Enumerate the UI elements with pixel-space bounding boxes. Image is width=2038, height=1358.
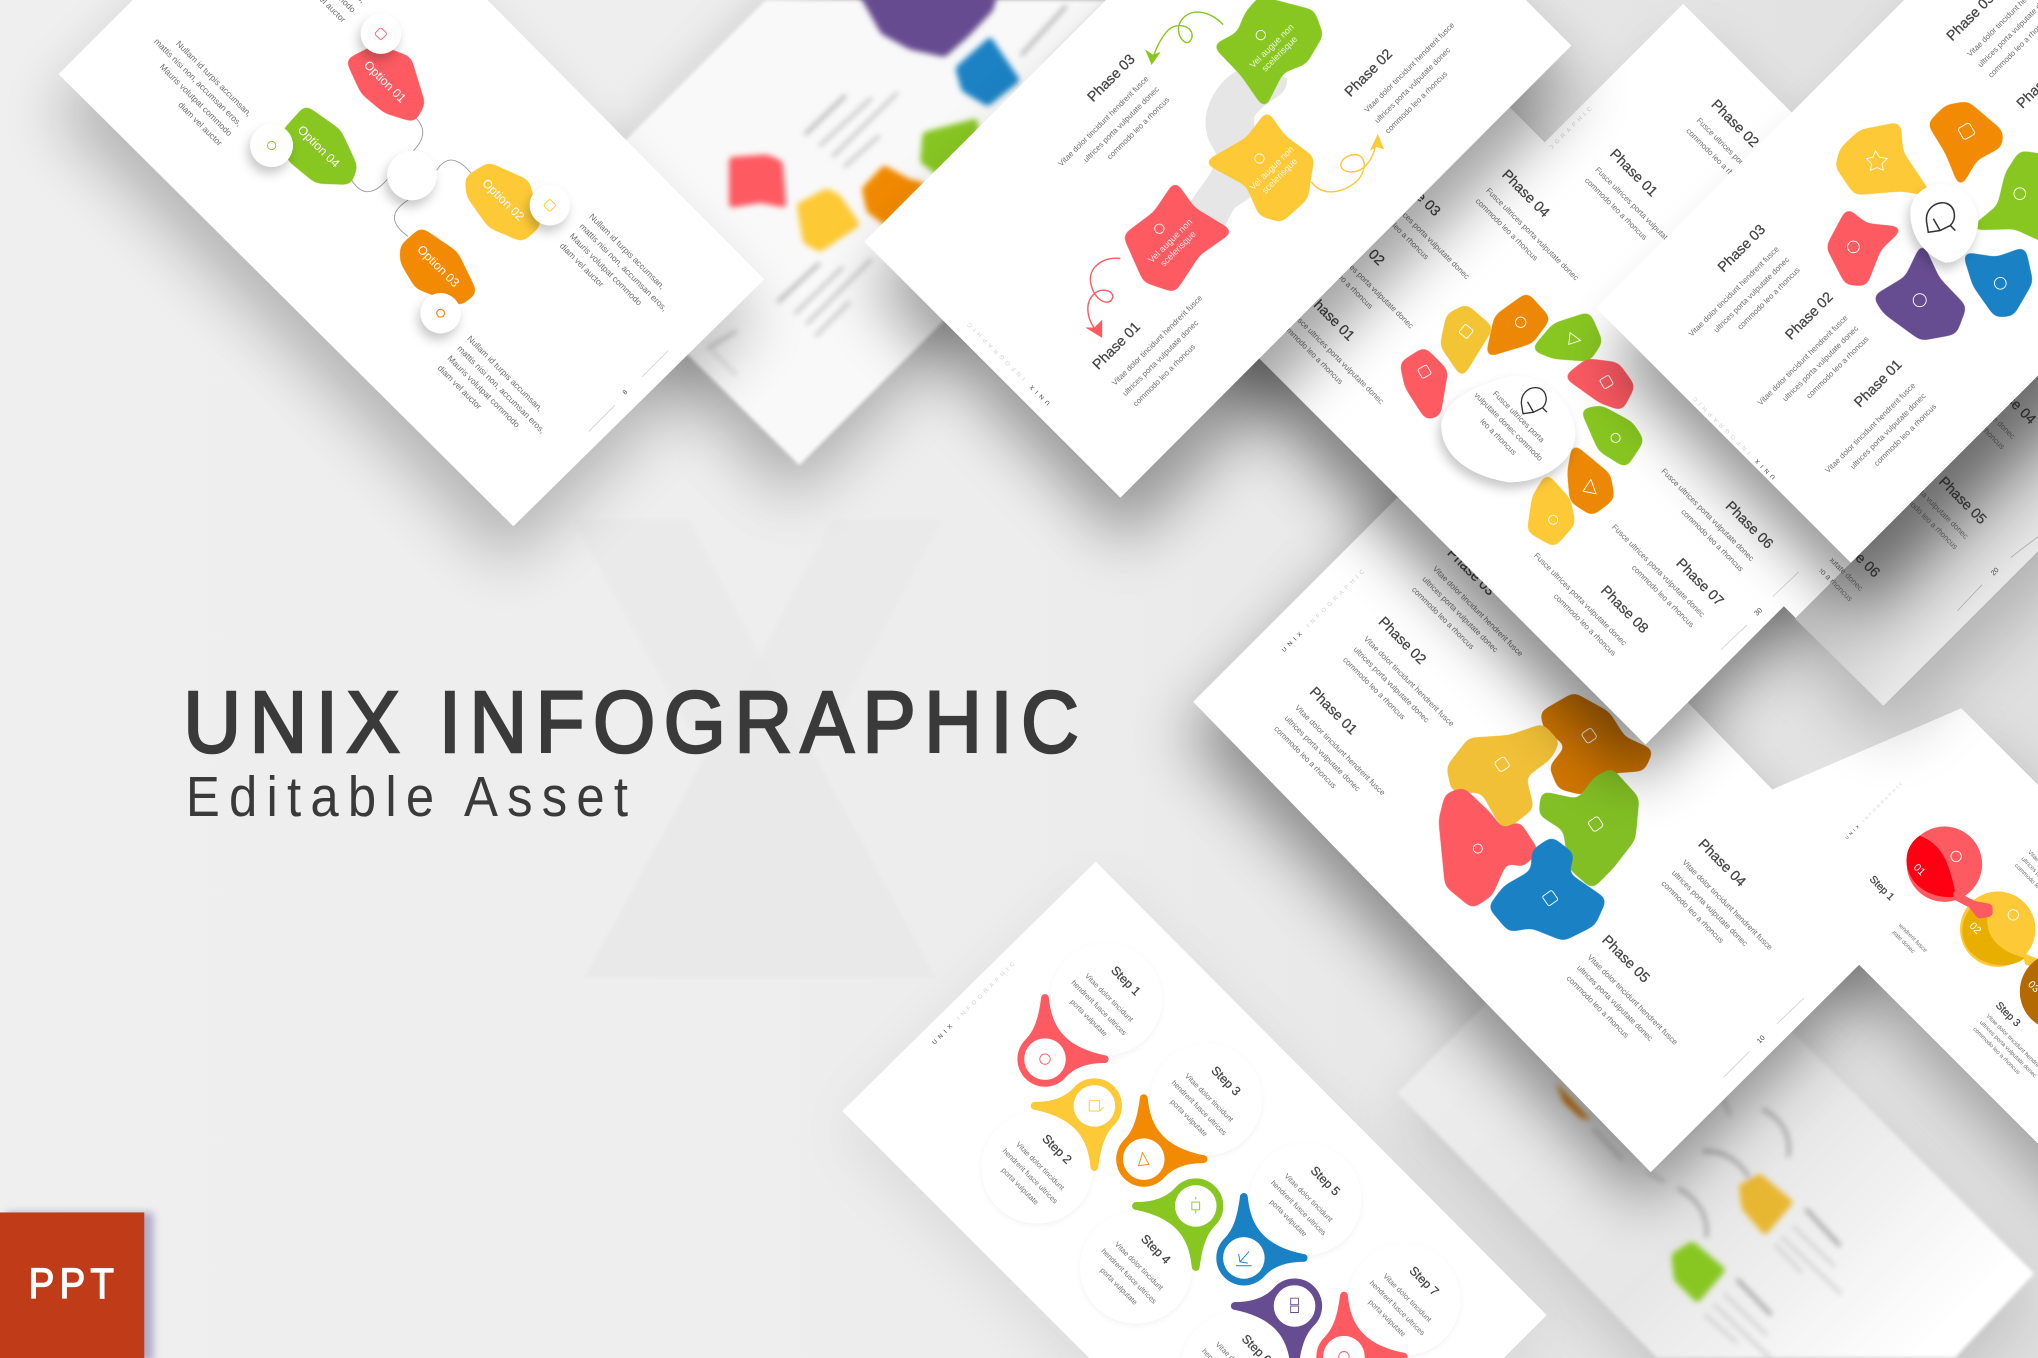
phase 08: Phase 08 <box>1597 583 1651 637</box>
slide label: UNIX INFOGRAPHIC <box>964 318 1052 406</box>
phase 05: Phase 05 <box>1935 474 1989 528</box>
phase 04: Phase 04 <box>1695 836 1749 890</box>
phase 03: commodo leo a rhoncus <box>1410 585 1476 651</box>
step 1 label: Step 1 <box>1867 874 1896 903</box>
phase 01: Phase 01 <box>1306 684 1360 738</box>
phase 01 <box>1272 684 1387 819</box>
shadow of five-blob slide <box>1185 485 1894 1206</box>
phase 04: Phase 04 <box>1985 374 2038 428</box>
step 7 bubble: Vitae dolor tincidunt <box>1381 1272 1434 1324</box>
petal: yellow <box>1835 122 1933 196</box>
ring: step 5 <box>1216 1193 1308 1286</box>
phase 03: ultrices porta vulputate donec <box>1081 85 1161 164</box>
step 4 bubble: hendrerit fusce ultrices <box>1099 1247 1159 1306</box>
blob: option 04: Option 04 <box>295 123 343 171</box>
blob: yellow: Vel augue non <box>1248 144 1296 192</box>
phase 01: commodo leo a rhoncus <box>1872 402 1938 468</box>
phase 02 <box>1342 20 1478 135</box>
step 3 text: ultrices porta vulputate donec <box>1978 1020 2037 1079</box>
phase 04: Vitae dolor tincidunt hendrerit fusce <box>1680 858 1775 952</box>
phase 01: Fusce ultrices porta vulputate donec <box>1593 165 1690 261</box>
connectors <box>350 114 472 237</box>
phase 03: Phase 03 <box>1444 545 1498 599</box>
blob: yellow <box>1204 110 1314 222</box>
phase 07: Fusce ultrices porta vulputate donec <box>1610 523 1706 619</box>
blob: option 02 <box>465 162 541 242</box>
phase 01: commodo leo a rhoncus <box>1131 342 1197 408</box>
phase 03: Vitae dolor tincidunt hendrerit fusce <box>1687 244 1781 338</box>
blob: red: Vel augue non <box>1146 217 1194 265</box>
phase 01 <box>1279 290 1385 416</box>
phase 04: Fusce ultrices porta vulputate donec <box>1484 186 1580 282</box>
page number: 30 <box>1753 606 1764 618</box>
phase 03: commodo leo a rhoncus <box>1105 95 1171 161</box>
page number: 8 <box>622 389 629 396</box>
phase 01: Phase 01 <box>1851 357 1905 411</box>
phase 05: Fusce ultrices porta vulputate donec <box>1874 445 1970 541</box>
slide: seven steps <box>842 862 1547 1358</box>
slide label: UNIX INFOGRAPHIC <box>1509 104 1596 191</box>
step 2 bubble: Step 2 <box>1039 1132 1075 1167</box>
shaded lower part <box>1795 368 2038 706</box>
petal: green lower <box>1580 405 1644 468</box>
phase 01: commodo leo a rhoncus <box>1272 724 1338 790</box>
phase 07: Phase 07 <box>1673 556 1727 610</box>
blob: red <box>1439 788 1539 908</box>
petal: orange <box>1928 101 2003 188</box>
phase 01: Vitae dolor tincidunt hendrerit fusce <box>1823 381 1918 475</box>
phase 03: Phase 03 <box>1715 222 1769 276</box>
phase 08: commodo leo a rhoncus <box>1552 592 1618 658</box>
blob: green <box>1539 768 1639 889</box>
phase 01: ultrices porta vulputate donec <box>1121 318 1200 398</box>
slide label: UNIX INFOGRAPHIC <box>1689 392 1777 480</box>
petal: green <box>1531 312 1603 361</box>
blob: option 03: Option 03 <box>414 242 462 290</box>
phase 01: commodo leo a rhoncus <box>1583 176 1649 242</box>
page number <box>1957 537 2038 611</box>
phase 07: commodo leo a rhoncus <box>1630 563 1696 629</box>
page number: 10 <box>1755 1034 1767 1045</box>
phase 02: commodo leo a rhoncus <box>1383 69 1449 135</box>
phase 06: Fusce ultrices porta vulputate donec <box>1660 467 1756 563</box>
shadow of eight-petal slide <box>1184 79 1886 781</box>
ring: step 7 <box>1316 1292 1408 1358</box>
phase 06: Phase 06 <box>1829 527 1883 581</box>
text: option 03: mattis nisi non, accumsan eros, <box>455 343 547 435</box>
phase 02: Phase 02 <box>1342 46 1396 100</box>
ring: step 3 <box>1116 1094 1207 1187</box>
step 1 text: Vitae dolor tincidunt hendrerit fusce <box>1857 884 1928 954</box>
step 4 bubble: Step 4 <box>1138 1232 1173 1267</box>
petal: orange <box>1486 292 1551 357</box>
slide: hidden phases behind flower <box>1432 4 2038 745</box>
ppt badge <box>0 1212 153 1358</box>
step 3 bubble <box>1150 1044 1262 1155</box>
slide label: UNIX INFOGRAPHIC <box>1281 566 1369 654</box>
phase 06: Phase 06 <box>1722 498 1776 552</box>
arrow: yellow <box>1311 134 1384 192</box>
slide label: UNIX INFOGRAPHIC <box>1844 779 1905 840</box>
text: option 04: Mauris volutpat commodo <box>158 62 234 138</box>
phase 02: commodo leo a rhoncus <box>1309 245 1375 311</box>
phase 06: Fusce ultrices porta vulputate donec <box>1769 497 1865 593</box>
phase 04: commodo leo a rhoncus <box>1474 197 1540 263</box>
droplet 03 <box>2020 953 2038 1031</box>
ring: step 2 <box>1031 1078 1122 1171</box>
step 1 text: ultrices porta vulputate donec <box>1856 896 1916 955</box>
step 3 bubble: Vitae dolor tincidunt <box>1183 1072 1235 1124</box>
phase 03: Vitae dolor tincidunt hendrerit fusce <box>1056 74 1151 168</box>
centre blob with text: vulputate donec commodo <box>1472 391 1545 463</box>
icon node: option 01 <box>361 14 401 54</box>
arrow: red <box>1085 258 1120 338</box>
phase 03 <box>1056 51 1172 189</box>
blob: blue <box>1488 837 1606 941</box>
phase 02 <box>1756 289 1871 428</box>
page number <box>1721 572 1799 650</box>
blob: yellow <box>1447 724 1560 832</box>
slide: blurred tag flow bottom right <box>1397 864 2034 1358</box>
step 2 bubble: Vitae dolor tincidunt <box>1014 1140 1066 1192</box>
ring: step 6 <box>1231 1278 1322 1358</box>
icon node: option 04 <box>250 124 293 167</box>
centre blob with text <box>1441 376 1575 482</box>
centre blob with text: Fusce ultrices porta <box>1491 389 1547 445</box>
phase 03: ultrices porta vulputate donec <box>1712 255 1791 334</box>
phase 04 top right <box>1944 0 2038 80</box>
step 7 bubble: hendrerit fusce ultrices <box>1368 1278 1427 1338</box>
phase 04: Fusce ultrices porta vulputate donec <box>1921 344 2017 441</box>
phase 06: commodo leo a rhoncus <box>1788 537 1854 603</box>
ppt badge: PPT <box>29 1259 114 1308</box>
step 5 bubble: Step 5 <box>1308 1163 1343 1199</box>
droplet 02: 02 <box>1967 921 1983 937</box>
text: option 04: Nullam id turpis accumsan, <box>174 39 254 118</box>
petal: yellow lower <box>1527 473 1575 547</box>
phase 04: commodo leo a rhoncus <box>1940 385 2007 451</box>
petal: yellow <box>1440 304 1493 378</box>
droplet 01 <box>1907 826 1993 919</box>
blurred coloured shapes <box>708 0 1105 374</box>
centre blob with icon <box>1910 184 1978 263</box>
phase 03 <box>1687 222 1802 359</box>
step 3 text: commodo leo a rhoncus <box>1971 1027 2021 1076</box>
petal: blue <box>1963 247 2033 317</box>
slide: blurred blobs top centre <box>542 0 1265 498</box>
phase 05: Phase 05 <box>1598 932 1652 986</box>
droplet 02 <box>1960 891 2038 969</box>
icon node: option 03 <box>420 293 461 333</box>
arrow: green <box>1145 12 1223 65</box>
step 3 bubble: porta vulputate <box>1169 1097 1209 1138</box>
ring: step 4 <box>1132 1178 1223 1271</box>
subtitle: Editable Asset <box>186 766 628 829</box>
phase 07 <box>1600 523 1727 629</box>
phase 02: Fusce ultrices porta vulputate donec <box>1319 234 1415 330</box>
phase 05: ultrices porta vulputate donec <box>1575 963 1655 1043</box>
slide: five blobs <box>1193 451 1902 1172</box>
centre blob with text: leo a rhoncus <box>1478 417 1518 457</box>
title block <box>183 673 1079 829</box>
step 7 bubble: Step 7 <box>1407 1264 1442 1299</box>
step 7 bubble: porta vulputate <box>1367 1297 1408 1338</box>
phase 01: Vitae dolor tincidunt hendrerit fusce <box>1293 703 1387 798</box>
text: option 03: diam vel auctor <box>436 363 484 411</box>
icon node: option 02 <box>530 185 570 225</box>
blurred shapes <box>1556 1083 1840 1358</box>
phase 06 <box>1649 467 1776 573</box>
blob: green <box>1213 0 1323 109</box>
text: option 02: diam vel auctor <box>558 241 606 289</box>
phase 03: commodo leo a rhoncus <box>1736 265 1802 332</box>
slide: droplet steps far right <box>1710 708 2038 1358</box>
step 5 bubble: porta vulputate <box>1268 1197 1309 1238</box>
text: option 03: Mauris volutpat commodo <box>446 353 522 430</box>
centre node <box>387 151 437 200</box>
phase 02: ultrices porta vulputate donec <box>1781 324 1860 403</box>
petal: orange lower <box>1567 443 1614 516</box>
text: option 04: mattis nisi non, accumsan eros, <box>152 36 244 128</box>
step 4 bubble: porta vulputate <box>1098 1266 1139 1307</box>
slide: flower <box>1596 0 2038 615</box>
phase 01: Phase 01 <box>1606 146 1660 200</box>
phase 01: Fusce ultrices porta vulputate donec <box>1289 310 1385 406</box>
phase 02: Vitae dolor tincidunt hendrerit fusce <box>1362 634 1456 729</box>
text: option 02: Mauris volutpat commodo <box>568 231 644 308</box>
phase 02 <box>1341 614 1456 750</box>
phase 05 <box>1565 932 1680 1068</box>
phase 02: ultrices porta vulputate donec <box>1352 645 1431 724</box>
step 5 bubble: Vitae dolor tincidunt <box>1283 1172 1335 1224</box>
phase 01: commodo leo a rhoncus <box>1279 320 1345 386</box>
step 1 bubble: hendrerit fusce ultrices <box>1070 978 1129 1037</box>
icon: head <box>1521 388 1547 414</box>
phase 03 <box>1410 545 1525 680</box>
phase 06 <box>1758 497 1883 603</box>
phase 03: ultrices porta vulputate donec <box>1420 575 1500 654</box>
phase 02: Phase 02 <box>1708 97 1762 151</box>
step 4 bubble <box>1080 1212 1192 1324</box>
petal: purple <box>1873 242 1967 340</box>
step 3 label: Step 3 <box>1993 1000 2022 1029</box>
phase 02: Phase 02 <box>1333 215 1387 269</box>
phase 03: Vitae dolor tincidunt hendrerit fusce <box>1431 564 1525 659</box>
phase 08 <box>1522 551 1651 658</box>
step 4 bubble: Vitae dolor tincidunt <box>1113 1240 1165 1292</box>
slide label: UNIX INFOGRAPHIC <box>932 959 1019 1046</box>
phase 04: commodo leo a rhoncus <box>1660 879 1726 945</box>
phase 03: Fusce ultrices porta vulputate donec <box>1375 185 1471 281</box>
step 2 bubble: hendrerit fusce ultrices <box>1001 1146 1060 1206</box>
step 1 bubble: Step 1 <box>1108 963 1143 999</box>
phase 01: ultrices porta vulputate donec <box>1848 391 1928 471</box>
phase 02: Phase 02 <box>1375 614 1429 668</box>
phase 08: Fusce ultrices porta vulputate donec <box>1532 551 1628 647</box>
phase 02: Vitae dolor tincidunt hendrerit fusce <box>1362 20 1457 114</box>
phase 01 <box>1823 357 1939 496</box>
phase 02: commodo leo a rhoncus <box>1805 334 1871 400</box>
step 2 bubble <box>981 1112 1093 1223</box>
petal: red <box>1826 208 1904 286</box>
phase 04 <box>1474 167 1580 293</box>
slide: eight petals <box>1194 43 1896 745</box>
page number <box>589 351 668 431</box>
blob: green: Vel augue non <box>1248 22 1296 70</box>
step 3 bubble: hendrerit fusce ultrices <box>1170 1078 1229 1137</box>
phase 04: ultrices porta vulputate donec <box>1670 868 1749 948</box>
phase 03: commodo leo a rhoncus <box>1365 195 1431 261</box>
step 1 text: commodo leo a rhoncus <box>1836 889 1885 938</box>
blob: red: scelerisque <box>1158 229 1198 268</box>
blob: green: scelerisque <box>1260 34 1299 74</box>
phase 01 <box>1583 146 1690 272</box>
grey connector <box>1183 65 1287 253</box>
step 5 bubble: hendrerit fusce ultrices <box>1269 1178 1328 1237</box>
phase 05: commodo leo a rhoncus <box>1894 485 1960 551</box>
petal: green <box>1968 151 2038 247</box>
icon: head <box>1926 203 1955 232</box>
phase 04 <box>1910 344 2038 451</box>
petal: red lower <box>1564 359 1635 411</box>
phase 03: Phase 03 <box>1389 166 1443 220</box>
blob: option 03 <box>400 227 477 305</box>
phase 02: Fusce ultrices porta vulputate donec <box>1695 116 1791 212</box>
text: option 02: Nullam id turpis accumsan, <box>587 211 667 291</box>
page number: 20 <box>1989 566 2001 577</box>
step 1 bubble <box>1050 943 1162 1055</box>
blob: option 01: Option 01 <box>361 58 409 106</box>
phase 02: Phase 02 <box>1783 289 1837 343</box>
phase 02 <box>1684 97 1791 223</box>
slide: three blobs with arrows <box>864 0 1578 543</box>
phase 04: Phase 04 <box>1498 167 1552 221</box>
blob: yellow: scelerisque <box>1260 156 1299 196</box>
phase 01: Vitae dolor tincidunt hendrerit fusce <box>1110 293 1205 387</box>
title: UNIX INFOGRAPHIC <box>183 673 1079 771</box>
phase 05: commodo leo a rhoncus <box>1565 974 1631 1040</box>
blob: option 01 <box>346 44 425 122</box>
phase 01 <box>1090 293 1226 408</box>
step 6 bubble <box>1181 1312 1293 1358</box>
text: option 02: mattis nisi non, accumsan eros, <box>578 221 669 313</box>
phase 05 <box>1864 445 1989 551</box>
blob: red <box>1123 181 1233 292</box>
phase 04 <box>1660 836 1775 973</box>
phase 05: Vitae dolor tincidunt hendrerit fusce <box>1586 953 1680 1047</box>
phase 01: Phase 01 <box>1303 290 1357 344</box>
ring: step 1 <box>1017 994 1109 1087</box>
text: option 03: Nullam id turpis accumsan, <box>465 334 545 413</box>
blob: option 02: Option 02 <box>479 176 527 224</box>
blob: orange <box>1540 693 1653 795</box>
phase 02: commodo leo a rhoncus <box>1341 655 1407 721</box>
phase 01: Phase 01 <box>1090 319 1144 373</box>
phase 03 <box>1365 166 1471 291</box>
phase 01: ultrices porta vulputate donec <box>1283 714 1362 793</box>
phase 02: Vitae dolor tincidunt hendrerit fusce <box>1756 313 1850 407</box>
text: option 04: diam vel auctor <box>176 100 225 148</box>
blob: option 04 <box>282 105 357 185</box>
page number <box>1723 998 1804 1077</box>
phase 03: Phase 03 <box>1085 51 1139 105</box>
step 5 bubble <box>1250 1144 1361 1255</box>
step 1 bubble: porta vulputate <box>1068 997 1109 1038</box>
step 1 bubble: Vitae dolor tincidunt <box>1083 971 1135 1024</box>
phase 06: commodo leo a rhoncus <box>1679 507 1745 573</box>
phase 02 <box>1309 215 1415 341</box>
droplet 01: 01 <box>1911 862 1927 878</box>
step 7 bubble <box>1348 1244 1460 1355</box>
phase 02: ultrices porta vulputate donec <box>1373 46 1452 125</box>
petal: red <box>1400 347 1448 420</box>
slide: option flow <box>52 0 764 565</box>
phase 02: commodo leo a rhoncus <box>1684 126 1750 192</box>
step 2 bubble: porta vulputate <box>1000 1166 1041 1207</box>
step 3 bubble: Step 3 <box>1208 1063 1244 1099</box>
